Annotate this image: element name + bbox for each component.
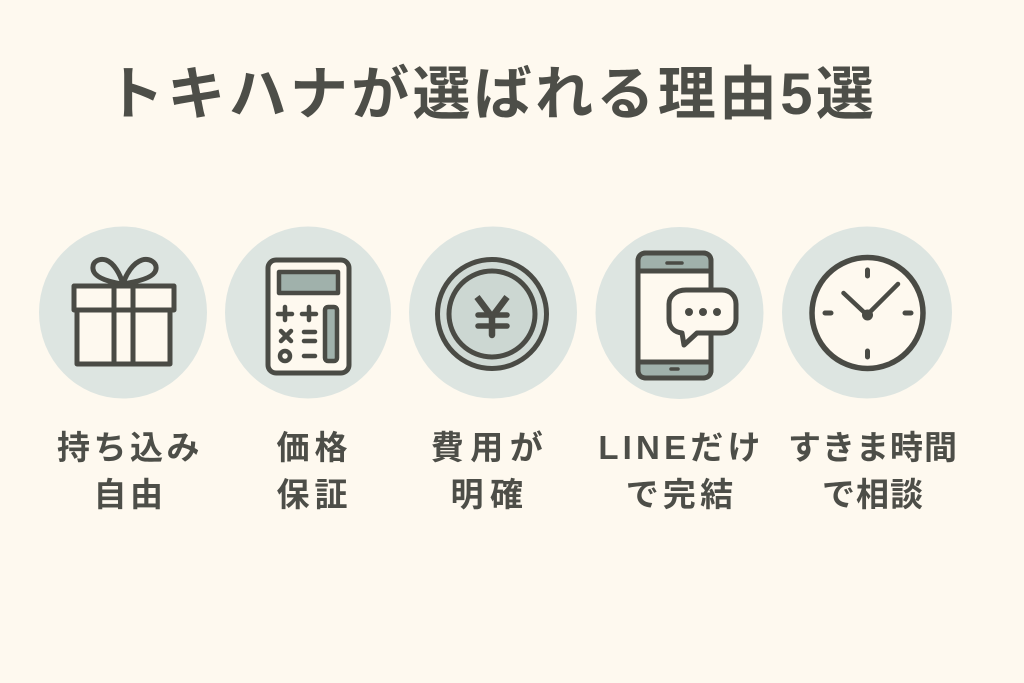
icon: yen coin [409, 226, 577, 398]
label: すきま時間で相談: すきま時間 [788, 429, 958, 466]
label: すきま時間で相談: で相談 [822, 476, 924, 513]
icon: smartphone with chat bubble [596, 227, 764, 399]
label: LINEだけで完結 [598, 429, 765, 513]
label: LINEだけで完結: で完結 [626, 476, 737, 513]
label: すきま時間で相談 [788, 429, 958, 513]
title: トキハナが選ばれる理由5選 [106, 62, 877, 127]
label: 持ち込み自由: 持ち込み [57, 429, 203, 466]
label: 価格保証 [276, 429, 352, 513]
label: 費用が明確 [431, 429, 549, 513]
label: 持ち込み自由 [57, 429, 203, 513]
icon: gift box [39, 226, 207, 398]
icon: calculator [225, 226, 391, 398]
label: LINEだけで完結: LINEだけ [598, 429, 765, 466]
label: 価格保証: 価格 [276, 429, 352, 466]
icon: clock [782, 226, 952, 398]
label: 費用が明確: 明確 [450, 476, 530, 513]
label: 価格保証: 保証 [276, 476, 352, 513]
label: 持ち込み自由: 自由 [94, 476, 166, 513]
label: 費用が明確: 費用が [431, 429, 549, 466]
